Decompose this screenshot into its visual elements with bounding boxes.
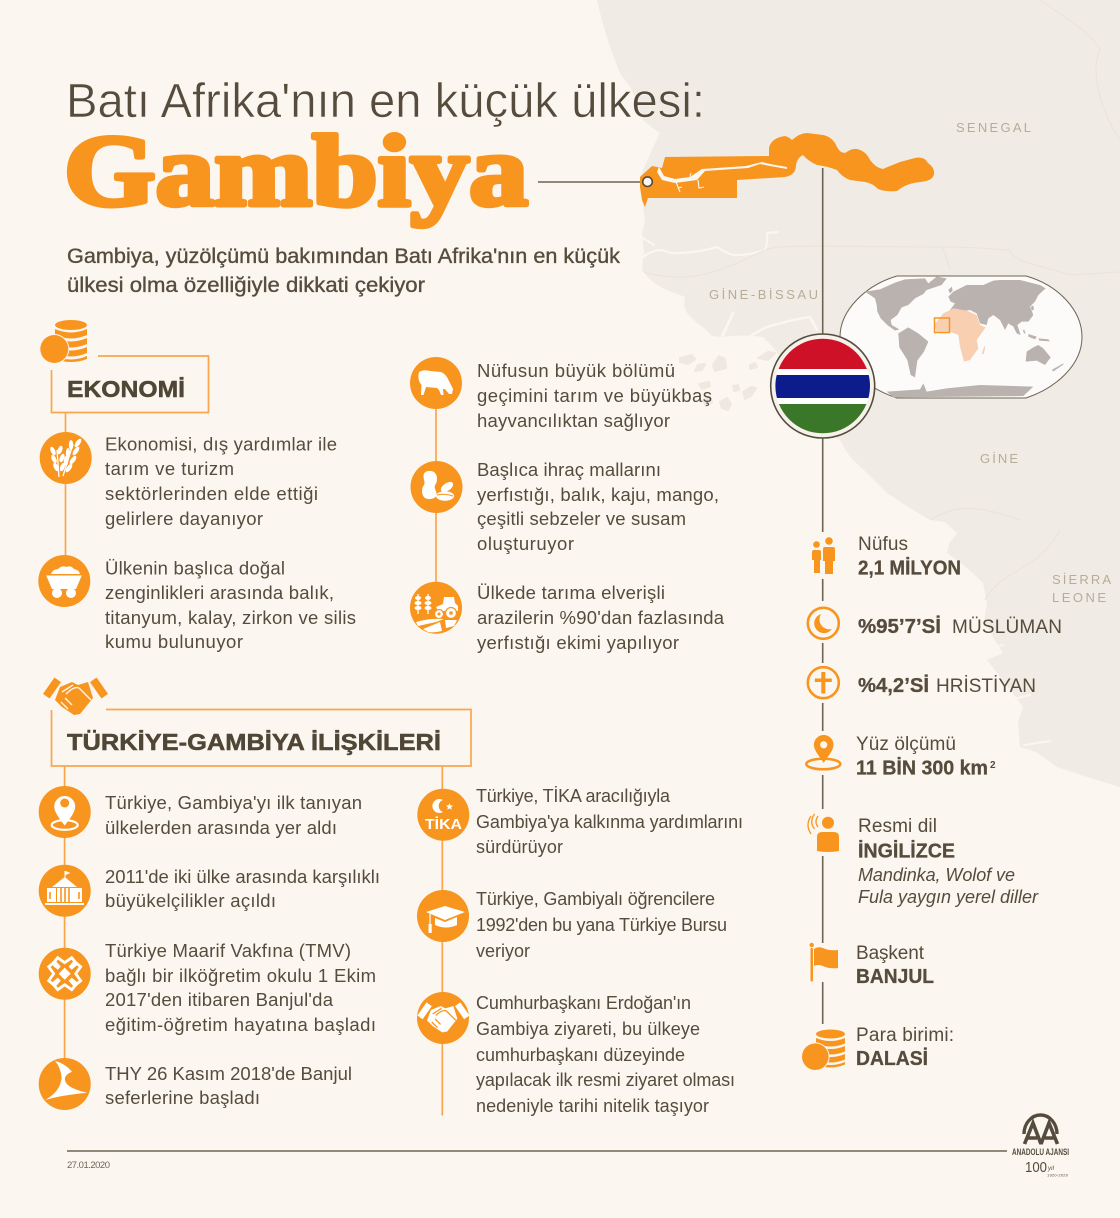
icon: farm and tractor	[410, 582, 462, 634]
text: capital	[856, 943, 934, 988]
logo: Anadolu Ajansı: ANADOLU AJANSI	[1012, 1147, 1069, 1158]
text: presidential visit: Cumhurbaşkanı Erdoğan'ın	[476, 993, 691, 1013]
heading box: EKONOMİ	[52, 356, 208, 412]
footer rule	[67, 1150, 1007, 1152]
subtitle: Gambiya, yüzölçümü bakımından Batı Afrika'nın en küçük	[67, 245, 621, 268]
icon: handshake	[43, 678, 108, 715]
icon: coins	[801, 1030, 845, 1071]
text: population: 2,1 MİLYON	[858, 556, 961, 580]
text: exports: oluşturuyor	[477, 533, 574, 554]
text: presidential visit: cumhurbaşkanı düzeyinde	[476, 1045, 685, 1065]
text: exports: çeşitli sebzeler ve susam	[477, 508, 686, 529]
icon: flag	[810, 943, 838, 982]
locator world map	[840, 276, 1082, 398]
subtitle	[67, 245, 621, 297]
text: economy base: sektörlerinden elde ettiği	[105, 483, 318, 504]
text: exports: Başlıca ihraç mallarını	[477, 459, 661, 480]
title: Batı Afrika'nın en küçük ülkesi:	[66, 75, 705, 128]
panel: economy	[38, 320, 725, 653]
text: natural resources: kumu bulunuyor	[105, 631, 243, 652]
text: THY flights: THY 26 Kasım 2018'de Banjul	[105, 1063, 352, 1084]
connector lines	[65, 766, 442, 1116]
map: West Africa land background	[597, 0, 1120, 787]
panel: key facts	[801, 534, 1062, 1071]
icon: Maarif ornament	[39, 948, 91, 1000]
icon: embassy building	[39, 865, 91, 917]
logo: Anadolu Ajansı: yıl	[1047, 1166, 1055, 1172]
text: peanut farming	[477, 582, 725, 653]
text: muslim share: %95’7’Sİ	[858, 615, 941, 638]
text: scholarship: veriyor	[476, 941, 530, 961]
country labels: SENEGAL	[956, 120, 1031, 135]
text: exports: yerfıstığı, balık, kaju, mango,	[477, 484, 719, 505]
text: muslim share: MÜSLÜMAN	[952, 617, 1062, 638]
text: exports	[477, 459, 719, 554]
text: capital: BANJUL	[856, 966, 934, 988]
text: presidential visit: Gambiya ziyareti, bu ülkeye	[476, 1019, 700, 1039]
text: embassies	[105, 866, 380, 911]
text: language: Mandinka, Wolof ve	[858, 865, 1015, 885]
logo: Anadolu Ajansı: 100	[1025, 1159, 1047, 1176]
text: recognition: ülkelerden arasında yer aldı	[105, 817, 337, 838]
text: language: Resmi dil	[858, 816, 937, 837]
country labels: LEONE	[1052, 590, 1106, 605]
text: Maarif Foundation: eğitim-öğretim hayatına başladı	[105, 1014, 376, 1035]
panel: Türkiye-Gambiya relations	[39, 678, 743, 1116]
subtitle: ülkesi olma özelliğiyle dikkati çekiyor	[67, 274, 425, 297]
text: area	[856, 734, 996, 780]
text: muslim share	[858, 615, 1062, 638]
icon: Turkish Airlines tail	[39, 1058, 91, 1110]
vertical facts timeline	[822, 168, 824, 1024]
text: language: İNGİLİZCE	[858, 840, 955, 862]
text: presidential visit: yapılacak ilk resmi ziyaret olması	[476, 1070, 735, 1090]
text: Maarif Foundation: Türkiye Maarif Vakfına (TMV)	[105, 940, 351, 961]
text: natural resources	[105, 558, 356, 652]
text: Maarif Foundation: bağlı bir ilköğretim okulu 1 Ekim	[105, 965, 376, 986]
text: THY flights	[105, 1063, 352, 1108]
text: area: Yüz ölçümü	[856, 734, 956, 755]
icon: TİKA: TİKA	[425, 816, 462, 833]
text: presidential visit	[476, 993, 735, 1116]
text: area: 11 BİN 300 km	[856, 756, 988, 780]
heading box: TÜRKİYE-GAMBİYA İLİŞKİLERİ: TÜRKİYE-GAMBİYA İLİŞKİLERİ	[67, 729, 441, 755]
icon: handshake	[417, 992, 469, 1044]
text: currency	[856, 1025, 954, 1070]
text: population	[858, 534, 961, 580]
text: peanut farming: Ülkede tarıma elverişli	[477, 582, 665, 603]
text: language: Fula yaygın yerel diller	[858, 887, 1039, 907]
icon: peanut and seeds	[410, 461, 462, 513]
map of Gambia	[538, 133, 934, 207]
icon: cross	[808, 667, 839, 698]
connector lines column 2	[435, 383, 437, 608]
text: scholarship: Türkiye, Gambiyalı öğrencilere	[476, 889, 715, 909]
text: agriculture and livestock	[477, 360, 712, 431]
text: TİKA aid: Türkiye, TİKA aracılığıyla	[476, 786, 671, 806]
text: scholarship: 1992'den bu yana Türkiye Bursu	[476, 915, 727, 935]
heading box: EKONOMİ: EKONOMİ	[67, 376, 185, 402]
icon: location pin	[39, 786, 91, 838]
text: TİKA aid	[476, 786, 743, 857]
text: peanut farming: yerfıstığı ekimi yapılıyor	[477, 632, 679, 653]
date: 27.01.2020	[67, 1160, 110, 1171]
icon: crescent	[808, 608, 839, 639]
text: currency: DALASİ	[856, 1047, 928, 1070]
text: TİKA aid: sürdürüyor	[476, 837, 563, 857]
text: economy base: gelirlere dayanıyor	[105, 508, 263, 529]
text: recognition: Türkiye, Gambiya'yı ilk tanıyan	[105, 792, 362, 813]
text: christian share: %4,2’Sİ	[858, 674, 929, 697]
text: natural resources: titanyum, kalay, zirkon ve silis	[105, 607, 356, 628]
text: capital: Başkent	[856, 943, 925, 964]
text: recognition	[105, 792, 362, 838]
text: currency: Para birimi:	[856, 1025, 954, 1046]
text: economy base	[105, 434, 337, 529]
text: embassies: büyükelçilikler açıldı	[105, 890, 276, 911]
icon: cow	[410, 357, 462, 409]
text: economy base: Ekonomisi, dış yardımlar ile	[105, 434, 337, 454]
icon: area pin	[806, 735, 840, 769]
text: area: 2	[990, 760, 996, 771]
icon: TİKA	[417, 789, 469, 841]
text: Maarif Foundation: 2017'den itibaren Banjul'da	[105, 989, 334, 1010]
text: peanut farming: arazilerin %90'dan fazlasında	[477, 607, 725, 628]
text: embassies: 2011'de iki ülke arasında karşılıklı	[105, 866, 380, 887]
flag of Gambia	[770, 334, 876, 438]
text: Maarif Foundation	[105, 940, 376, 1035]
text: language	[858, 816, 1039, 907]
connector lines	[64, 412, 66, 560]
country labels	[709, 120, 1111, 605]
heading box: TÜRKİYE-GAMBİYA İLİŞKİLERİ	[52, 710, 471, 766]
text: agriculture and livestock: hayvancılıktan sağlıyor	[477, 410, 670, 431]
country labels: GİNE-BİSSAU	[709, 287, 818, 302]
text: christian share: HRİSTİYAN	[936, 676, 1036, 697]
text: agriculture and livestock: Nüfusun büyük bölümü	[477, 360, 675, 381]
text: natural resources: zenginlikleri arasında balık,	[105, 582, 334, 603]
text: agriculture and livestock: geçimini tarım ve büyükbaş	[477, 385, 712, 406]
icon: mining cart	[38, 555, 90, 607]
icon: speaking person	[808, 814, 839, 852]
text: TİKA aid: Gambiya'ya kalkınma yardımlarını	[476, 812, 743, 832]
text: natural resources: Ülkenin başlıca doğal	[105, 558, 285, 578]
heading: Gambiya: Gambiya	[64, 115, 528, 228]
icon: wheat	[40, 432, 92, 484]
text: economy base: tarım ve turizm	[105, 458, 234, 479]
country labels: SİERRA	[1052, 572, 1111, 587]
icon: coins	[39, 320, 87, 364]
text: christian share	[858, 674, 1036, 697]
text: population: Nüfus	[858, 534, 908, 555]
logo: Anadolu Ajansı: 1920-2020	[1047, 1172, 1069, 1178]
icon: population	[812, 537, 835, 574]
text: presidential visit: nedeniyle tarihi nitelik taşıyor	[476, 1096, 709, 1116]
text: THY flights: seferlerine başladı	[105, 1087, 260, 1108]
icon: graduation cap	[417, 890, 469, 942]
logo: Anadolu Ajansı	[1012, 1115, 1069, 1178]
text: scholarship	[476, 889, 727, 961]
country labels: GİNE	[980, 451, 1018, 466]
